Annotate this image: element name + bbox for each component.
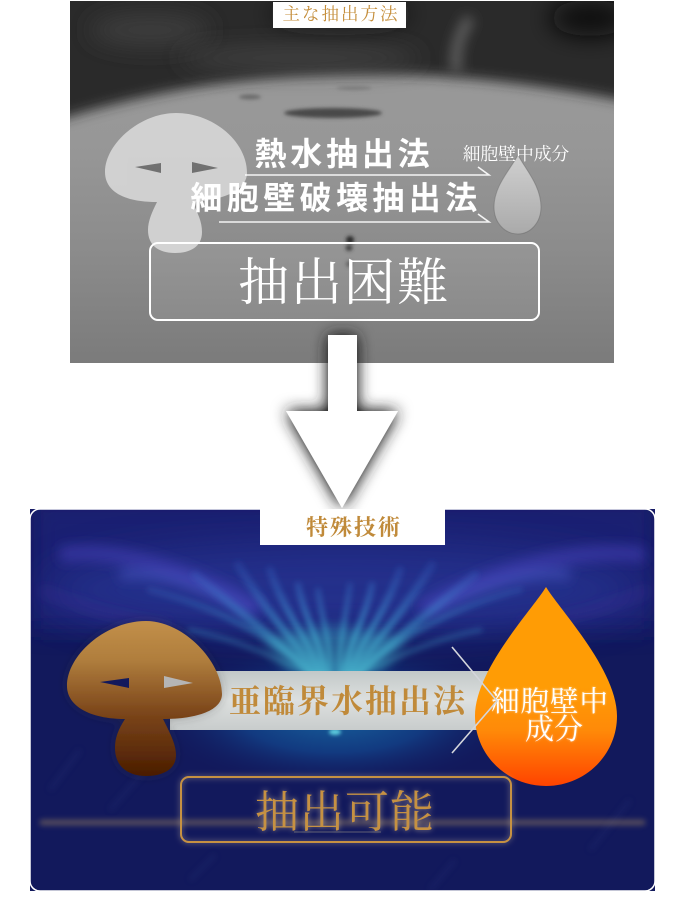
arrow: down arrow	[286, 335, 398, 508]
heading: hot water extraction: 熱水抽出法	[254, 136, 434, 172]
icon: mushroom right eye	[164, 676, 193, 688]
callout: extraction possible: 抽出可能	[255, 788, 435, 837]
icon: orange droplet with text	[475, 587, 617, 786]
arrow: hot water extraction	[245, 167, 489, 175]
light rays fan	[150, 565, 520, 680]
icon: grey mushroom	[105, 113, 247, 253]
icon: orange droplet with text: 成分	[525, 713, 583, 746]
background: navy energy burst	[30, 499, 655, 891]
label: special technology	[260, 509, 445, 545]
text: cell wall contents: 細胞壁中成分	[463, 144, 570, 164]
fan base glow	[262, 625, 408, 675]
arrow: cell wall breaking extraction	[219, 214, 489, 222]
band: subcritical water extraction: 亜臨界水抽出法	[229, 683, 468, 719]
label: main extraction methods: 主な抽出方法	[282, 4, 400, 24]
panel border	[30, 509, 655, 891]
label: main extraction methods	[273, 2, 406, 28]
icon: orange droplet with text: 細胞壁中	[491, 686, 609, 718]
arrow: penetration lines	[452, 647, 497, 753]
callout: difficult extraction: 抽出困難	[238, 256, 450, 312]
panel: conventional extraction methods	[70, 1, 614, 363]
panel: special technology	[30, 499, 655, 891]
heading: cell wall breaking extraction: 細胞壁破壊抽出法	[190, 180, 482, 216]
icon: mushroom left eye	[100, 678, 129, 688]
swirl: left and right	[40, 553, 650, 625]
icon: grey droplet	[494, 155, 541, 234]
band: subcritical water extraction	[170, 671, 490, 730]
faint streaks	[50, 750, 630, 890]
callout: extraction possible	[181, 777, 511, 842]
label: special technology: 特殊技術	[306, 515, 402, 540]
callout: difficult extraction	[150, 243, 539, 320]
icon: brown mushroom	[67, 621, 222, 776]
photo background: steaming pot	[70, 1, 614, 363]
